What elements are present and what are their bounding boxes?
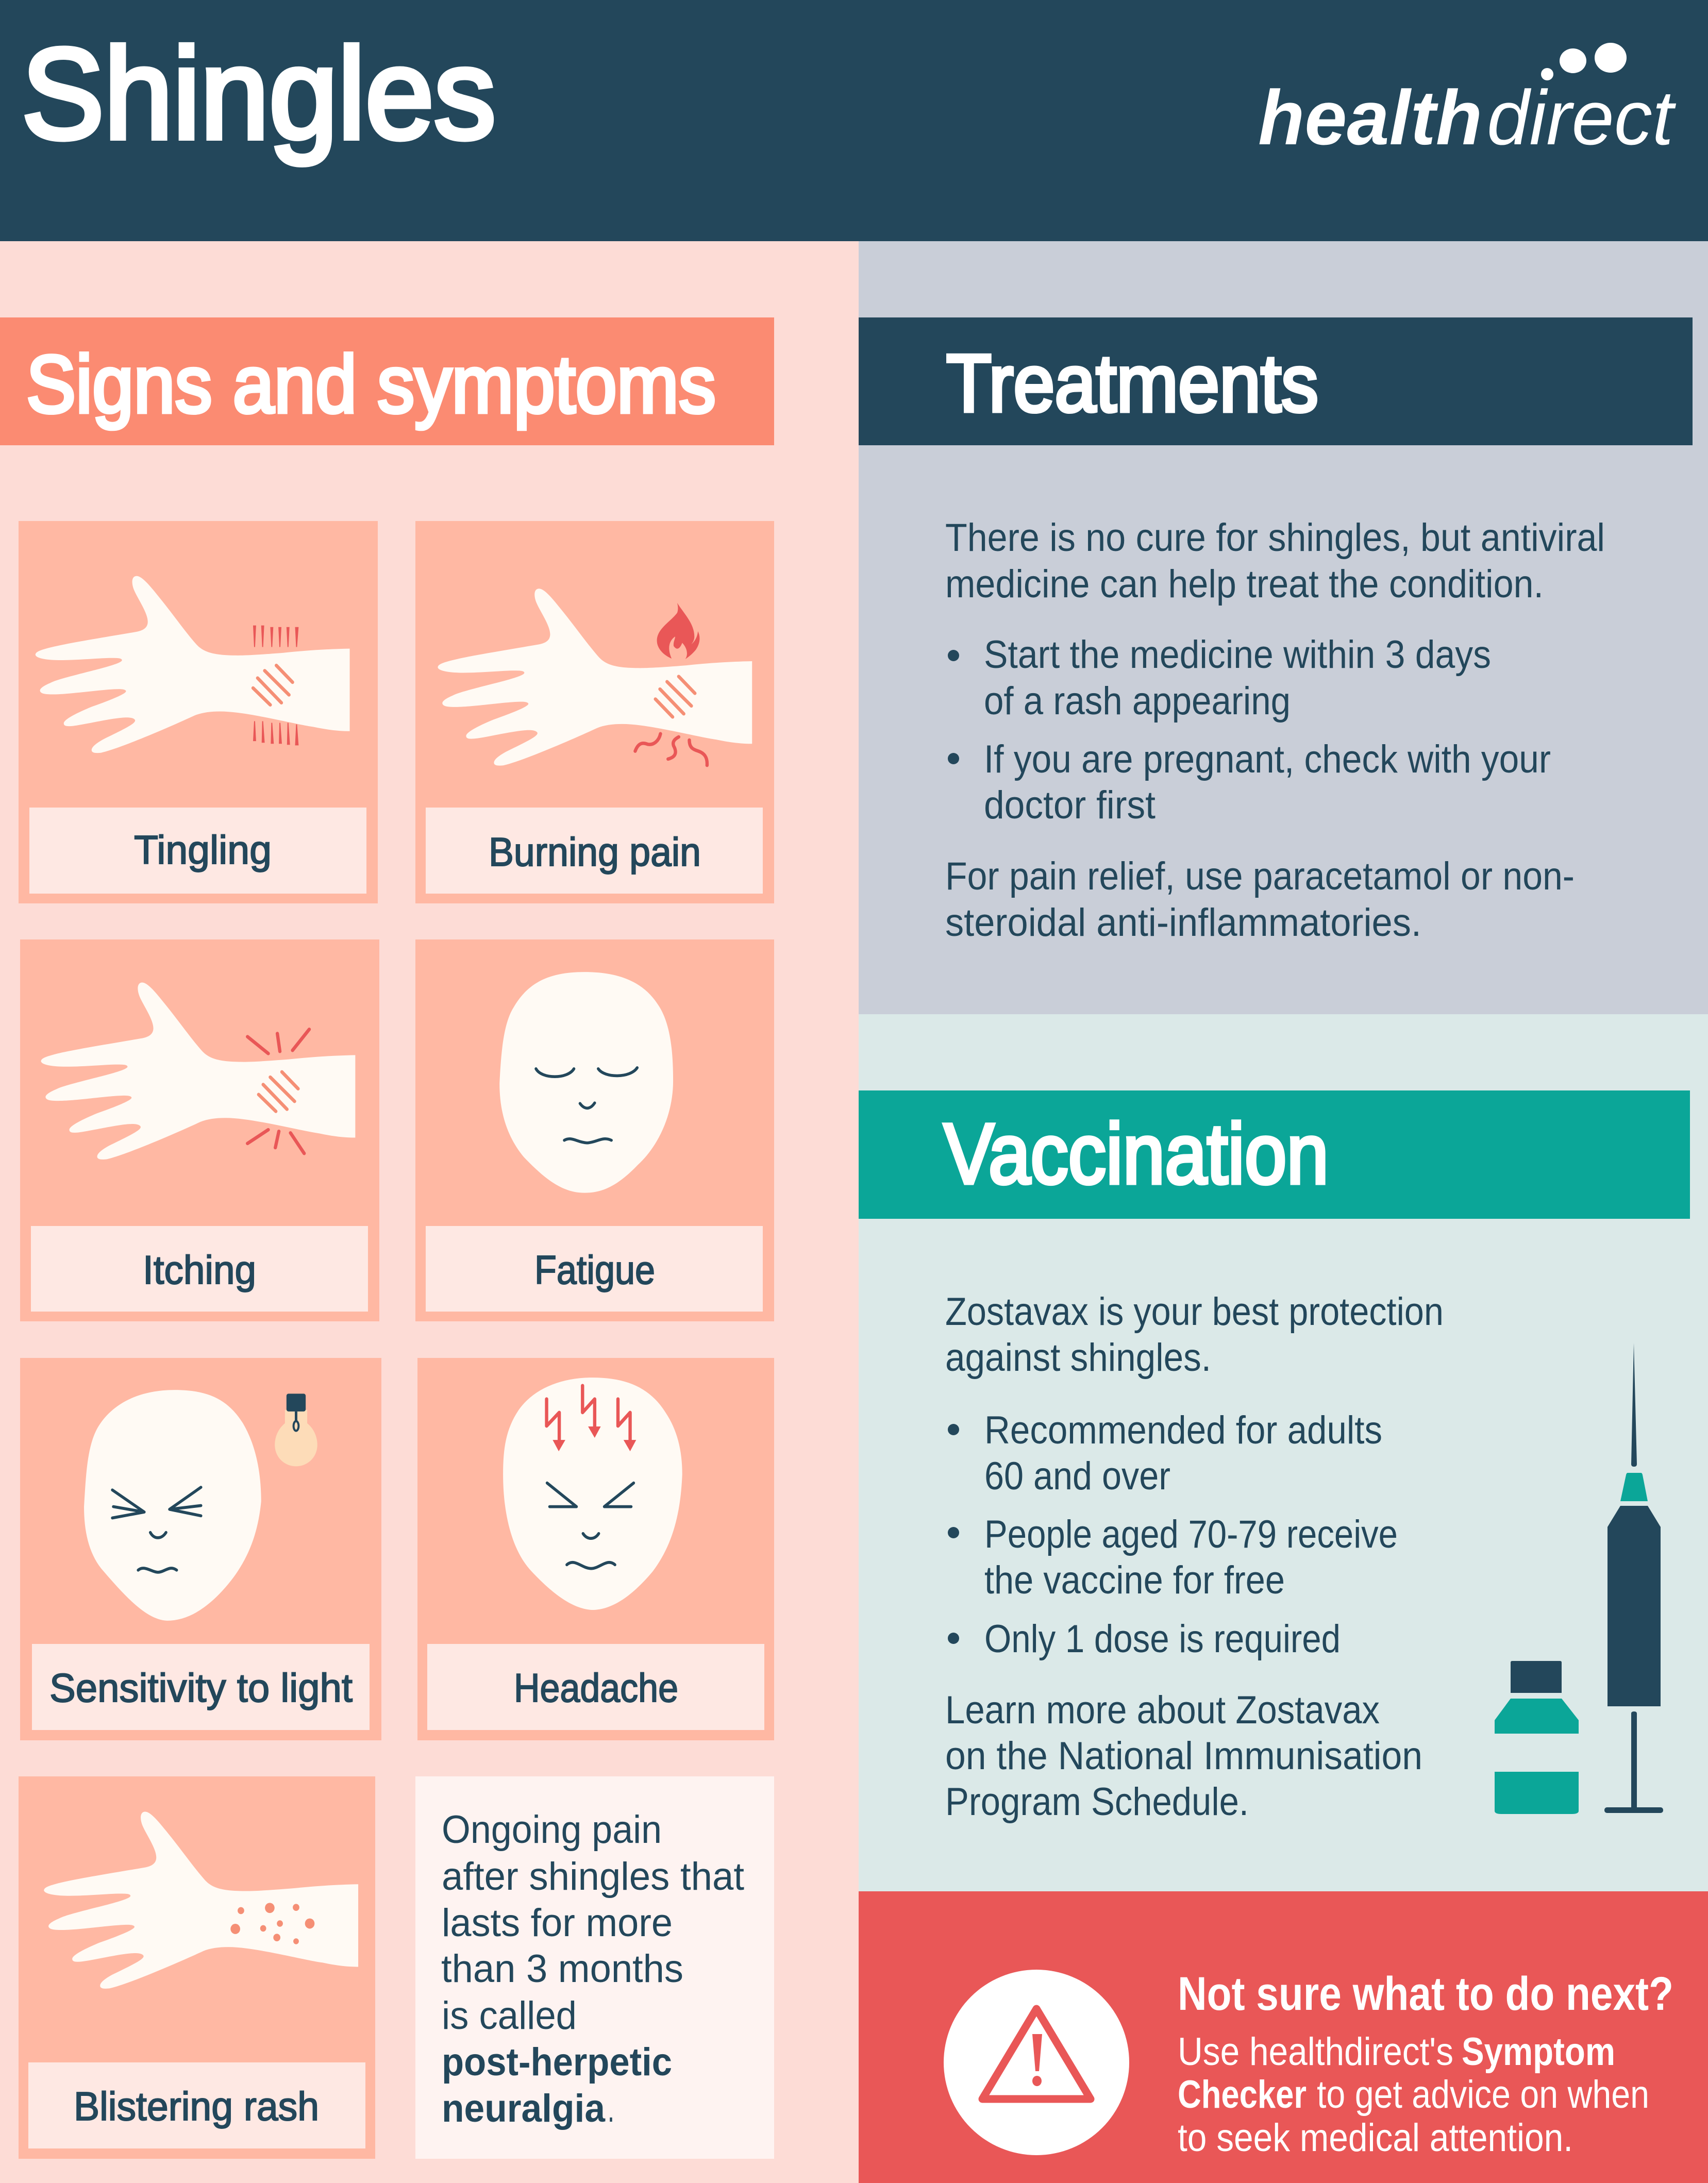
label: tingling [29, 808, 366, 894]
heading: signs and symptoms: Signs and symptoms [26, 339, 716, 430]
text block: learn more: Learn more about Zostavax [945, 1688, 1380, 1732]
text block: intro [945, 516, 1605, 606]
text block: symptom checker: Symptom [1462, 2030, 1615, 2074]
text block: symptom checker: to get advice on when [1317, 2073, 1649, 2117]
label: headache [427, 1644, 764, 1730]
panel: vaccination [859, 1090, 1690, 1824]
label: burning pain: Burning pain [489, 829, 701, 875]
text block: symptom checker: Checker [1178, 2073, 1307, 2117]
label: fatigue: Fatigue [534, 1247, 655, 1292]
icon: hand with rash dots [44, 1811, 358, 1989]
bullet list: vaccination: Recommended for adults [984, 1408, 1382, 1452]
card: headache [417, 1358, 774, 1740]
icon: hand with flame [438, 589, 752, 766]
header band [0, 0, 1708, 241]
callout: post-herpetic neuralgia: than 3 months [441, 1947, 683, 1991]
card: blistering rash [19, 1776, 375, 2159]
label: tingling: Tingling [134, 827, 272, 872]
card: itching [20, 939, 379, 1321]
text block: pain relief: steroidal anti-inflammatories. [945, 901, 1421, 945]
text block: intro: medicine can help treat the condition. [945, 562, 1544, 606]
callout: post-herpetic neuralgia [415, 1776, 774, 2159]
heading: treatments: Treatments [946, 338, 1318, 429]
bullet list: vaccination: Only 1 dose is required [984, 1617, 1341, 1661]
text block: intro: There is no cure for shingles, but antiviral [945, 516, 1605, 560]
label: headache: Headache [514, 1665, 678, 1710]
text block: learn more [945, 1688, 1422, 1824]
icon: face with lightning arrows [503, 1378, 682, 1610]
text block: learn more: on the National Immunisation [945, 1734, 1422, 1778]
heading: vaccination [859, 1090, 1690, 1219]
panel: signs and symptoms [0, 317, 774, 2159]
card: fatigue [415, 939, 774, 1321]
icon: tired face [499, 972, 673, 1193]
card: sensitivity to light [20, 1358, 381, 1740]
bullet list: vaccination: the vaccine for free [984, 1558, 1285, 1602]
heading: signs and symptoms [0, 317, 774, 445]
icon: hand with itch marks [41, 983, 355, 1160]
label: sensitivity to light [32, 1644, 370, 1730]
panel: treatments [859, 317, 1693, 945]
label: itching: Itching [143, 1247, 256, 1292]
callout: post-herpetic neuralgia: lasts for more [442, 1901, 673, 1945]
panel: next steps [859, 1891, 1708, 2183]
heading: vaccination: Vaccination [944, 1106, 1329, 1202]
callout: post-herpetic neuralgia: Ongoing pain [442, 1808, 662, 1852]
icon: syringe [1604, 1343, 1663, 1813]
label: burning pain [426, 808, 763, 894]
callout: post-herpetic neuralgia: neuralgia [442, 2087, 606, 2130]
bullet list: treatments: If you are pregnant, check with your [984, 737, 1551, 781]
logo: healthdirect [1258, 43, 1676, 161]
bullet list: vaccination: 60 and over [984, 1454, 1170, 1498]
heading: treatments [859, 317, 1693, 445]
icon: warning triangle [944, 1970, 1129, 2155]
logo: healthdirect: direct [1487, 74, 1676, 161]
text block: Zostavax intro: against shingles. [945, 1336, 1211, 1380]
callout: post-herpetic neuralgia: post-herpetic [442, 2040, 672, 2084]
bullet list: treatments: doctor first [984, 783, 1156, 827]
callout: post-herpetic neuralgia: is called [442, 1994, 577, 2038]
text block: Zostavax intro: Zostavax is your best protection [945, 1290, 1444, 1334]
label: blistering rash [28, 2062, 365, 2148]
text block: pain relief [945, 854, 1575, 945]
logo: healthdirect: health [1258, 74, 1482, 161]
bullet list: vaccination: People aged 70-79 receive [984, 1513, 1398, 1556]
card: tingling [19, 521, 378, 903]
icon: vaccine bottle [1495, 1661, 1579, 1814]
text block: symptom checker [1178, 2030, 1649, 2160]
text block: Zostavax intro [945, 1290, 1444, 1380]
icon: hand with tingling spikes [36, 576, 350, 753]
bullet list: vaccination [948, 1408, 1398, 1661]
callout: post-herpetic neuralgia: after shingles that [442, 1855, 744, 1899]
card: burning pain [415, 521, 774, 903]
bullet list: treatments: Start the medicine within 3 days [984, 633, 1491, 677]
text block: symptom checker: to seek medical attention. [1178, 2116, 1573, 2160]
label: blistering rash: Blistering rash [74, 2084, 319, 2129]
text block: pain relief: For pain relief, use paracetamol or non- [945, 854, 1575, 898]
text block: learn more: Program Schedule. [945, 1780, 1249, 1824]
bullet list: treatments [948, 633, 1551, 827]
text block: symptom checker: Use healthdirect's [1178, 2030, 1453, 2074]
callout: post-herpetic neuralgia: . [608, 2087, 614, 2130]
title: Shingles [22, 22, 496, 165]
bullet list: treatments: of a rash appearing [984, 679, 1291, 723]
label: fatigue [426, 1226, 763, 1312]
icon: squinting face with light bulb [84, 1390, 317, 1621]
label: itching [31, 1226, 368, 1312]
label: sensitivity to light: Sensitivity to light [49, 1665, 353, 1710]
